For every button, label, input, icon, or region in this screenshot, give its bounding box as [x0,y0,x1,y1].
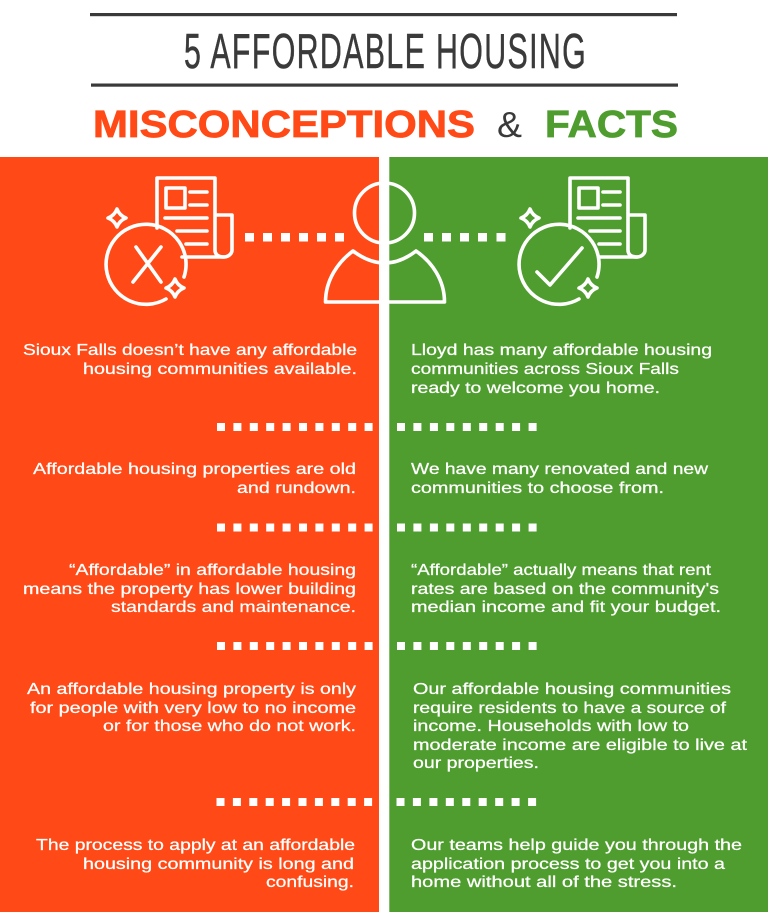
title: 5 AFFORDABLE HOUSING [184,24,586,79]
fact 2 [411,461,709,497]
misconception 5: housing community is long and [83,856,354,873]
misconception 3 [23,562,356,616]
divider dots 2 [397,524,537,532]
fact 4: moderate income are eligible to live at [413,737,748,754]
fact 5: home without all of the stress. [411,874,677,891]
misconception 1 [23,342,357,378]
misconception 1: housing communities available. [83,361,357,378]
misconception 2 [33,461,356,497]
misconception 5: confusing. [266,874,354,891]
fact 4: income. Households with low to [413,718,689,735]
divider dots 2 [217,524,373,532]
fact 4 [413,681,748,772]
misconception 5: The process to apply at an affordable [36,837,355,854]
icon: newspaper with X [106,178,232,304]
fact 1: communities across Sioux Falls [411,361,679,378]
fact 4: our properties. [413,755,539,772]
header [90,13,678,146]
fact 2: We have many renovated and new [411,461,709,478]
subtitle: FACTS [545,104,678,146]
misconception 2: Affordable housing properties are old [33,461,356,478]
fact 1 [411,342,712,397]
fact 4: require residents to have a source of [413,700,727,717]
misconception 5 [36,837,355,891]
fact 2: communities to choose from. [411,480,664,497]
fact 4: Our affordable housing communities [413,681,731,698]
divider dots 3 [397,642,537,650]
misconception 4: An affordable housing property is only [27,681,356,698]
misconception 4 [27,681,356,735]
divider dots 3 [217,642,373,650]
icon: person [326,183,444,302]
fact 1: Lloyd has many affordable housing [411,342,712,359]
fact 3: median income and fit your budget. [411,599,721,616]
icon: newspaper with check [519,178,645,304]
misconception 4: or for those who do not work. [103,718,356,735]
divider dots 4 [396,798,536,806]
fact 5: Our teams help guide you through the [411,837,742,854]
subtitle: & [497,104,522,145]
divider dots 1 [217,423,373,431]
fact 3 [411,562,721,616]
fact 3: rates are based on the community's [411,581,719,598]
subtitle [93,104,678,146]
divider dots 1 [397,423,537,431]
misconception 3: “Affordable” in affordable housing [69,562,356,579]
misconception 2: and rundown. [237,480,356,497]
panel: misconceptions [0,157,379,912]
connector dots: right [424,233,506,242]
misconception 1: Sioux Falls doesn’t have any affordable [23,342,357,359]
panel: facts [389,157,768,912]
misconception 4: for people with very low to no income [30,700,356,717]
misconception 3: means the property has lower building [23,581,356,598]
fact 1: ready to welcome you home. [411,380,660,397]
misconception 3: standards and maintenance. [111,599,356,616]
fact 3: “Affordable” actually means that rent [411,562,712,579]
divider dots 4 [216,798,372,806]
fact 5 [411,837,742,891]
connector dots: left [245,233,344,242]
subtitle: MISCONCEPTIONS [93,104,475,146]
fact 5: application process to get you into a [411,856,725,873]
